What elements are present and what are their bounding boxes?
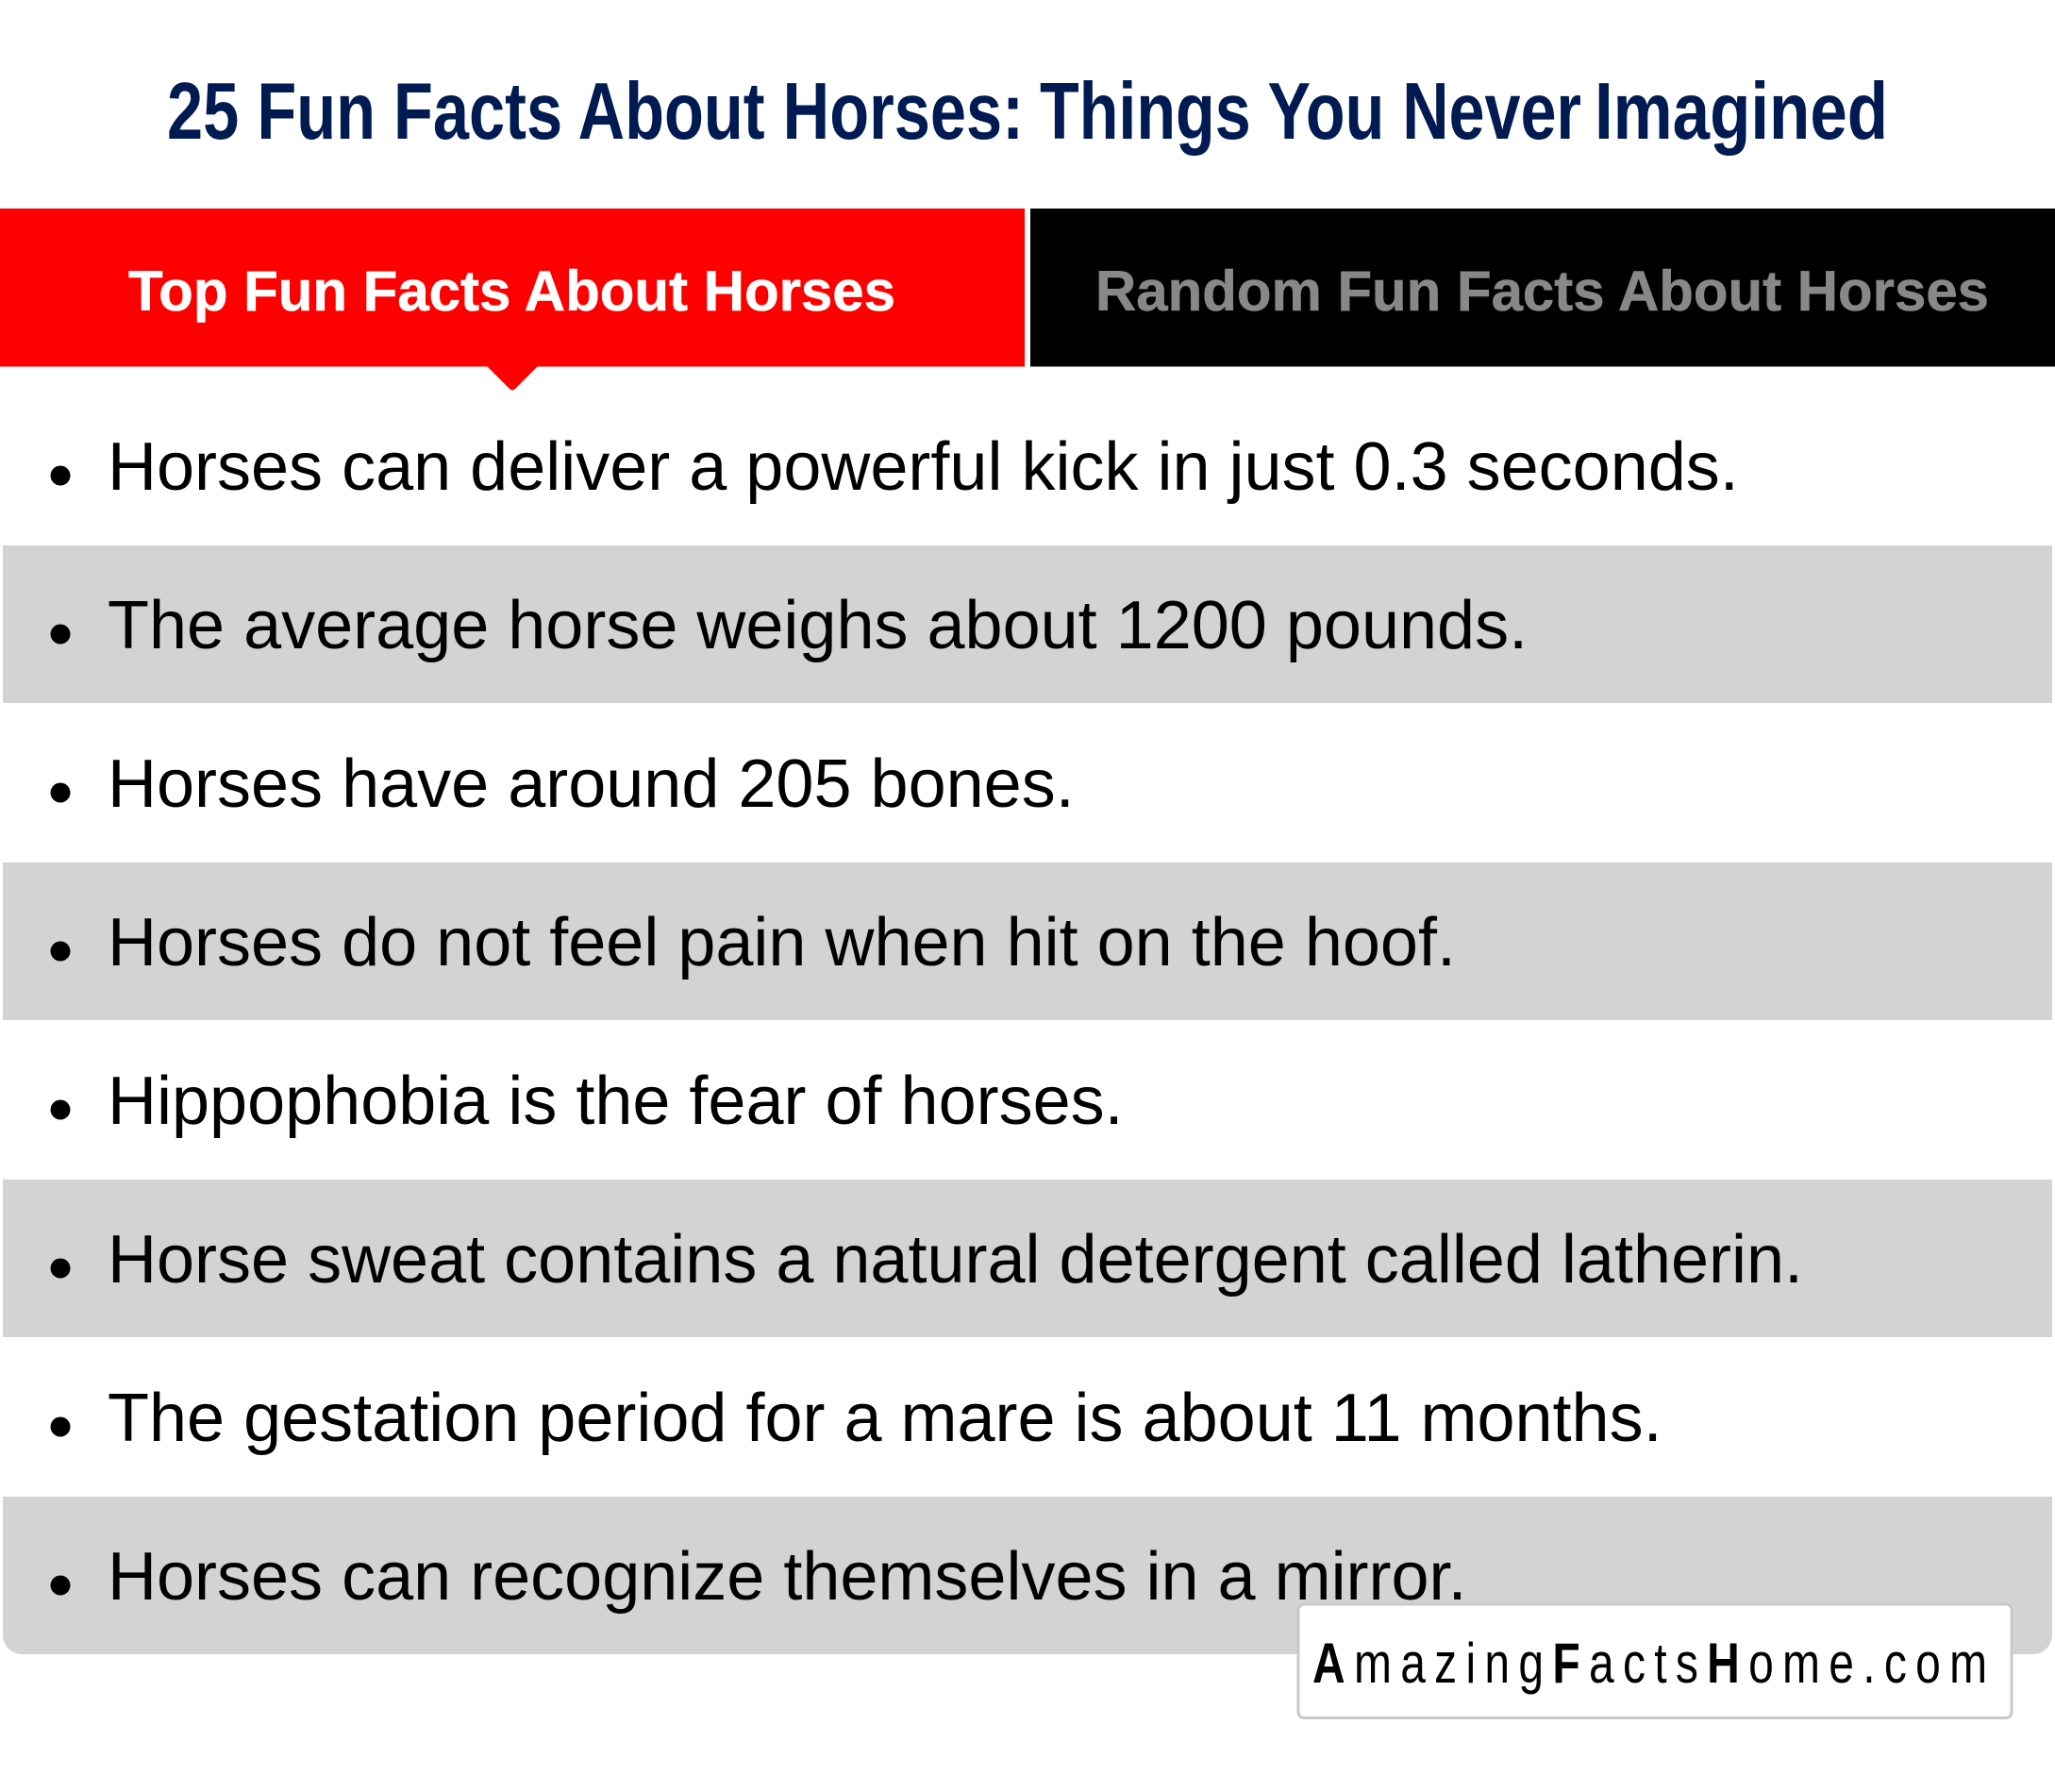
tab: random fun facts (inactive) xyxy=(1030,209,2055,366)
fact row 2 xyxy=(3,545,2052,703)
fact row 6: Horse sweat contains a natural detergent called latherin. xyxy=(108,1222,1803,1298)
title: Things You Never xyxy=(1040,67,1581,157)
fact row 4 xyxy=(3,863,2052,1020)
watermark: AmazingFactsHome.com xyxy=(1298,1604,2012,1717)
title: Imagined xyxy=(1595,67,1888,157)
title: 25 Fun Facts About Horses: xyxy=(167,67,1024,157)
tab: top fun facts (active): Top Fun Facts About Horses xyxy=(128,260,895,323)
fact row 5: Hippophobia is the fear of horses. xyxy=(108,1063,1124,1139)
tab: top fun facts (active) xyxy=(0,209,1025,391)
fact row 8 xyxy=(3,1497,2052,1654)
watermark: AmazingFactsHome.com: AmazingFactsHome.com xyxy=(1312,1632,1996,1695)
fact row 6 xyxy=(3,1180,2052,1337)
fact row 3: Horses have around 205 bones. xyxy=(108,746,1075,822)
fact row 8: Horses can recognize themselves in a mirror. xyxy=(108,1539,1467,1615)
fact row 2: The average horse weighs about 1200 pounds. xyxy=(108,588,1528,663)
fact row 1: Horses can deliver a powerful kick in just 0.3 seconds. xyxy=(108,429,1739,505)
fact row 4: Horses do not feel pain when hit on the hoof. xyxy=(108,905,1456,980)
title xyxy=(167,67,1888,157)
tab: random fun facts (inactive): Random Fun Facts About Horses xyxy=(1095,260,1989,323)
fact row 7: The gestation period for a mare is about 11 months. xyxy=(108,1381,1662,1456)
